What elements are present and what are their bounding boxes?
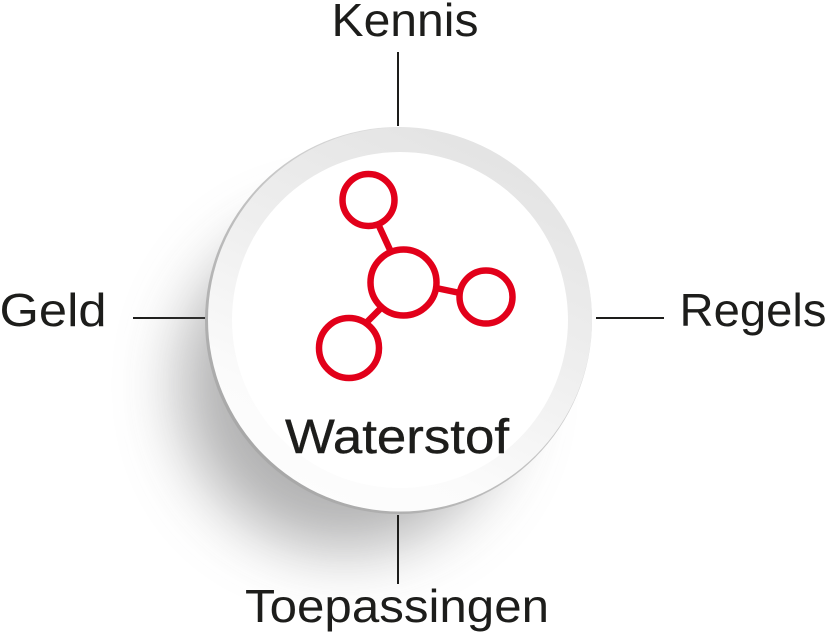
connector: Toepassingen (397, 515, 399, 584)
icon: hydrogen molecule (319, 174, 512, 378)
label: Geld: Geld (0, 284, 106, 336)
connector: Regels (596, 317, 664, 319)
label: Toepassingen: Toepassingen (245, 580, 549, 632)
drop shadow (180, 220, 510, 550)
connector: Kennis (397, 52, 399, 126)
central disc (205, 127, 592, 514)
label: Regels: Regels (680, 284, 826, 336)
connector: Geld (133, 317, 206, 319)
title: Waterstof: Waterstof (285, 411, 510, 464)
